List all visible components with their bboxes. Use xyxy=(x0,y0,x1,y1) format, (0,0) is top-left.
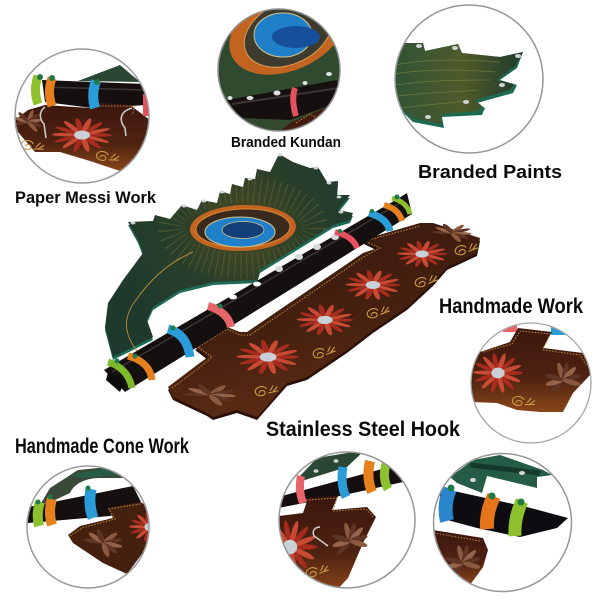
detail circle: paints xyxy=(390,5,543,153)
feather tip dots xyxy=(130,154,344,224)
peacock feather xyxy=(105,154,353,360)
callout: handmade work xyxy=(439,295,592,443)
detail circle: cone work xyxy=(26,465,150,589)
flute holes xyxy=(229,234,339,299)
label: branded paints: Branded Paints xyxy=(418,161,562,182)
callout: branded paints xyxy=(390,5,562,182)
label: handmade cone work: Handmade Cone Work xyxy=(15,435,189,458)
detail circle: paper messi xyxy=(13,49,151,183)
green band knots xyxy=(114,194,400,364)
label: paper messi work: Paper Messi Work xyxy=(15,188,157,207)
callout: paper messi work xyxy=(13,49,157,207)
callout: branded kundan xyxy=(217,8,341,147)
wooden board xyxy=(168,221,480,420)
callout: flute tip close-up xyxy=(430,454,572,592)
label: stainless steel hook: Stainless Steel Hook xyxy=(266,418,460,441)
coloured bands xyxy=(108,198,410,388)
label: branded kundan: Branded Kundan xyxy=(231,134,341,151)
feather eye xyxy=(189,203,297,253)
central product: peacock feather flute key holder xyxy=(104,154,480,420)
callout: handmade cone work xyxy=(15,435,189,588)
copper flowers xyxy=(179,221,476,408)
callout: stainless steel hook xyxy=(263,418,460,592)
detail circle: kundan xyxy=(217,8,341,132)
flute xyxy=(104,193,412,392)
detail circle: handmade xyxy=(471,323,592,443)
gold scroll motifs xyxy=(255,242,478,396)
red flowers xyxy=(236,240,447,374)
label: handmade work: Handmade Work xyxy=(439,295,583,318)
detail circle: steel hook xyxy=(278,451,416,589)
